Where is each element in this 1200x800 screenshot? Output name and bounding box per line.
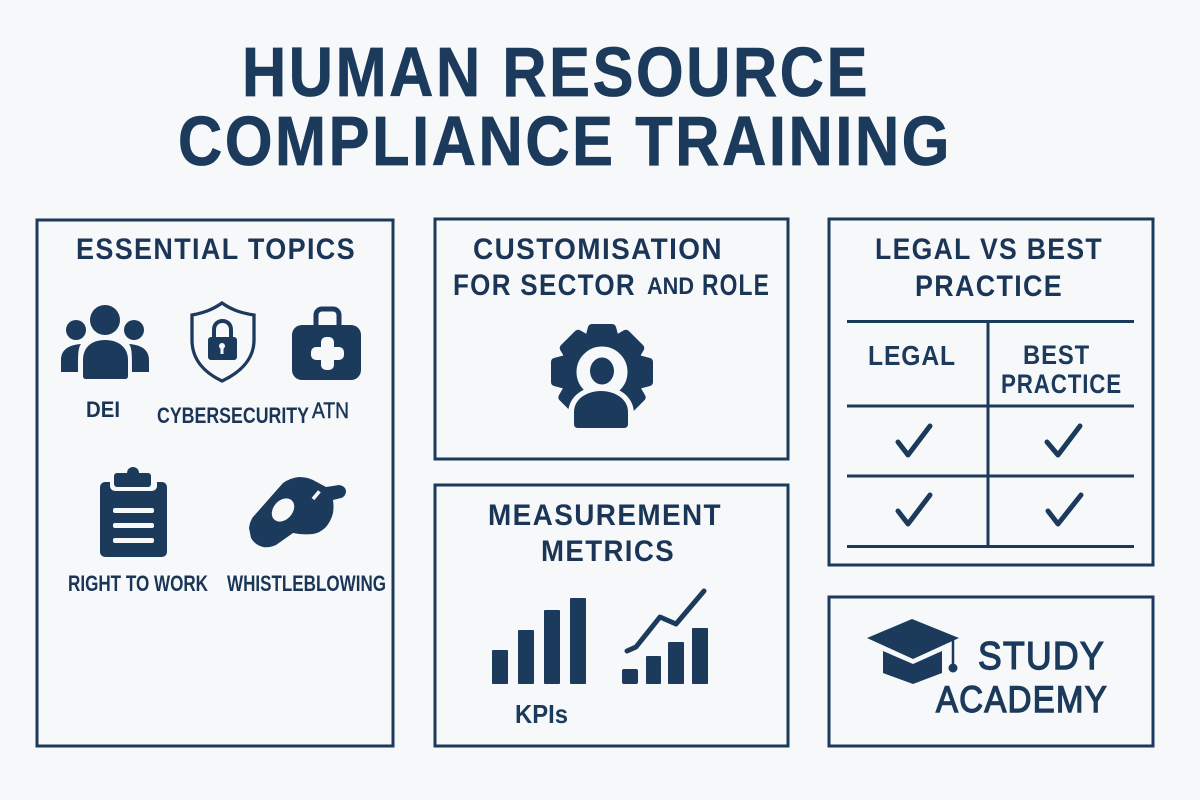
- column header: best practice: BEST: [1023, 340, 1090, 370]
- chart: bars with trend line: [622, 591, 708, 684]
- column header: best practice: [1001, 340, 1122, 399]
- icon: check legal row 1: [898, 426, 930, 455]
- chart: KPI bars: [492, 598, 586, 684]
- icon: check legal row 2: [898, 495, 930, 524]
- heading: customisation: [453, 233, 770, 302]
- panel: legal vs best practice: [829, 219, 1153, 565]
- icon: people (DEI): [61, 305, 149, 379]
- heading: customisation: CUSTOMISATION: [473, 233, 723, 266]
- panel: essential topics: [37, 220, 393, 746]
- table grid: [847, 322, 1134, 546]
- icon: check best practice row 1: [1047, 426, 1080, 455]
- label: cybersecurity: CYBERSECURITY: [157, 403, 309, 428]
- icon: clipboard: [100, 467, 167, 557]
- heading: measurement metrics: [488, 499, 722, 568]
- heading: customisation: AND: [647, 273, 694, 300]
- panel: measurement metrics: [435, 485, 788, 746]
- icon: check best practice row 2: [1048, 495, 1081, 524]
- heading: measurement metrics: MEASUREMENT: [488, 499, 722, 532]
- title: HUMAN RESOURCE: [242, 33, 870, 111]
- title: COMPLIANCE TRAINING: [178, 102, 952, 180]
- label: whistleblowing: WHISTLEBLOWING: [227, 571, 386, 596]
- heading: measurement metrics: METRICS: [541, 535, 675, 568]
- heading: legal vs best practice: PRACTICE: [915, 270, 1063, 303]
- icon: shield and lock: [192, 303, 254, 381]
- label: DEI: DEI: [86, 397, 120, 422]
- heading: legal vs best practice: [875, 233, 1103, 303]
- icon: graduation cap: [867, 619, 959, 684]
- column header: best practice: PRACTICE: [1001, 369, 1122, 399]
- wordmark: study academy: ACADEMY: [936, 679, 1108, 720]
- column header: legal: LEGAL: [868, 340, 956, 371]
- heading: customisation: ROLE: [702, 269, 770, 302]
- heading: legal vs best practice: LEGAL VS BEST: [875, 233, 1103, 266]
- label: right to work: RIGHT TO WORK: [68, 571, 208, 596]
- icon: whistle: [249, 477, 346, 547]
- icon: medical case: [292, 309, 361, 380]
- wordmark: study academy: STUDY: [978, 635, 1105, 678]
- heading: customisation: FOR SECTOR: [453, 269, 636, 302]
- title: [178, 33, 952, 180]
- label: ATN: ATN: [312, 398, 349, 423]
- heading: essential topics: ESSENTIAL TOPICS: [76, 233, 356, 266]
- label: KPIs: KPIs: [515, 699, 568, 729]
- wordmark: study academy: [936, 635, 1108, 720]
- panel: customisation: [435, 219, 788, 459]
- panel: study academy: [829, 597, 1153, 746]
- icon: gear with person: [551, 324, 653, 432]
